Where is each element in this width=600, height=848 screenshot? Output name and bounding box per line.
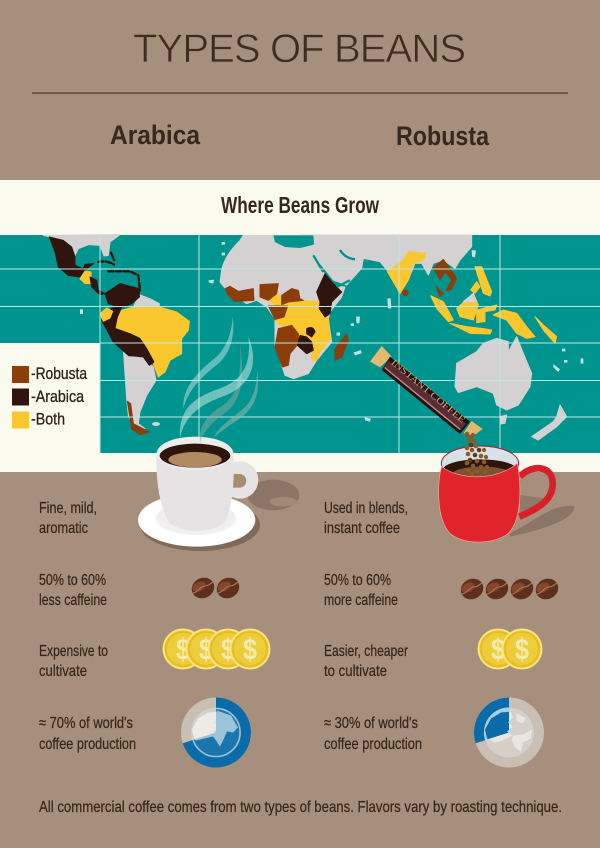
icon: four gold coins bbox=[162, 628, 270, 670]
text: robusta production bbox=[324, 715, 422, 753]
panel: where beans grow band bbox=[0, 180, 600, 472]
heading: Arabica: Arabica bbox=[110, 120, 201, 150]
icon: instant coffee stick bbox=[370, 346, 483, 436]
map: africa bbox=[208, 235, 350, 379]
text: arabica cost: cultivate bbox=[39, 663, 87, 680]
stick label: INSTANT COFFEE bbox=[389, 358, 467, 426]
legend: both: -Both bbox=[31, 410, 65, 428]
text: arabica cost: Expensive to bbox=[39, 643, 108, 660]
steam bbox=[180, 317, 258, 443]
text: robusta caffeine: more caffeine bbox=[324, 592, 398, 609]
text: arabica cost bbox=[39, 643, 108, 680]
legend bbox=[12, 364, 87, 428]
icon: two coffee beans bbox=[188, 574, 243, 602]
icon: red coffee cup bbox=[439, 446, 574, 542]
text: robusta cost: to cultivate bbox=[324, 663, 387, 680]
map: asia and oceania bbox=[300, 235, 583, 440]
heading: where beans grow: Where Beans Grow bbox=[221, 192, 379, 218]
text: arabica production: coffee production bbox=[39, 736, 136, 753]
chart: robusta 30 percent donut bbox=[474, 698, 544, 768]
icon: white coffee cup with steam bbox=[138, 317, 299, 551]
icon: four coffee beans bbox=[457, 575, 562, 603]
text: robusta caffeine bbox=[324, 572, 398, 609]
text: arabica flavor bbox=[39, 500, 97, 537]
icon: two gold coins bbox=[478, 628, 542, 670]
brown lower panel bbox=[0, 472, 600, 848]
text: robusta flavor: Used in blends, bbox=[324, 500, 408, 517]
text: robusta production: coffee production bbox=[324, 736, 422, 753]
text: robusta production: ≈ 30% of world's bbox=[324, 715, 418, 732]
text: arabica caffeine bbox=[39, 572, 107, 609]
text: arabica production: ≈ 70% of world's bbox=[39, 715, 133, 732]
world map bbox=[0, 235, 600, 453]
legend: robusta: -Robusta bbox=[31, 364, 87, 383]
text: arabica caffeine: less caffeine bbox=[39, 592, 107, 609]
text: arabica caffeine: 50% to 60% bbox=[39, 572, 106, 589]
text: robusta flavor: instant coffee bbox=[324, 520, 400, 537]
map: americas bbox=[43, 235, 189, 435]
text: arabica production bbox=[39, 715, 136, 753]
heading: Robusta: Robusta bbox=[396, 121, 490, 151]
text: robusta flavor bbox=[324, 500, 408, 537]
text: robusta cost: Easier, cheaper bbox=[324, 643, 409, 660]
legend: arabica: -Arabica bbox=[31, 387, 84, 406]
text: arabica flavor: Fine, mild, bbox=[39, 500, 97, 517]
title: TYPES OF BEANS bbox=[133, 27, 466, 71]
text: robusta caffeine: 50% to 60% bbox=[324, 572, 391, 589]
text: arabica flavor: aromatic bbox=[39, 520, 88, 537]
icon: falling coffee granules bbox=[465, 432, 489, 476]
text: robusta cost bbox=[324, 643, 409, 680]
chart: arabica 70 percent donut bbox=[181, 698, 251, 768]
